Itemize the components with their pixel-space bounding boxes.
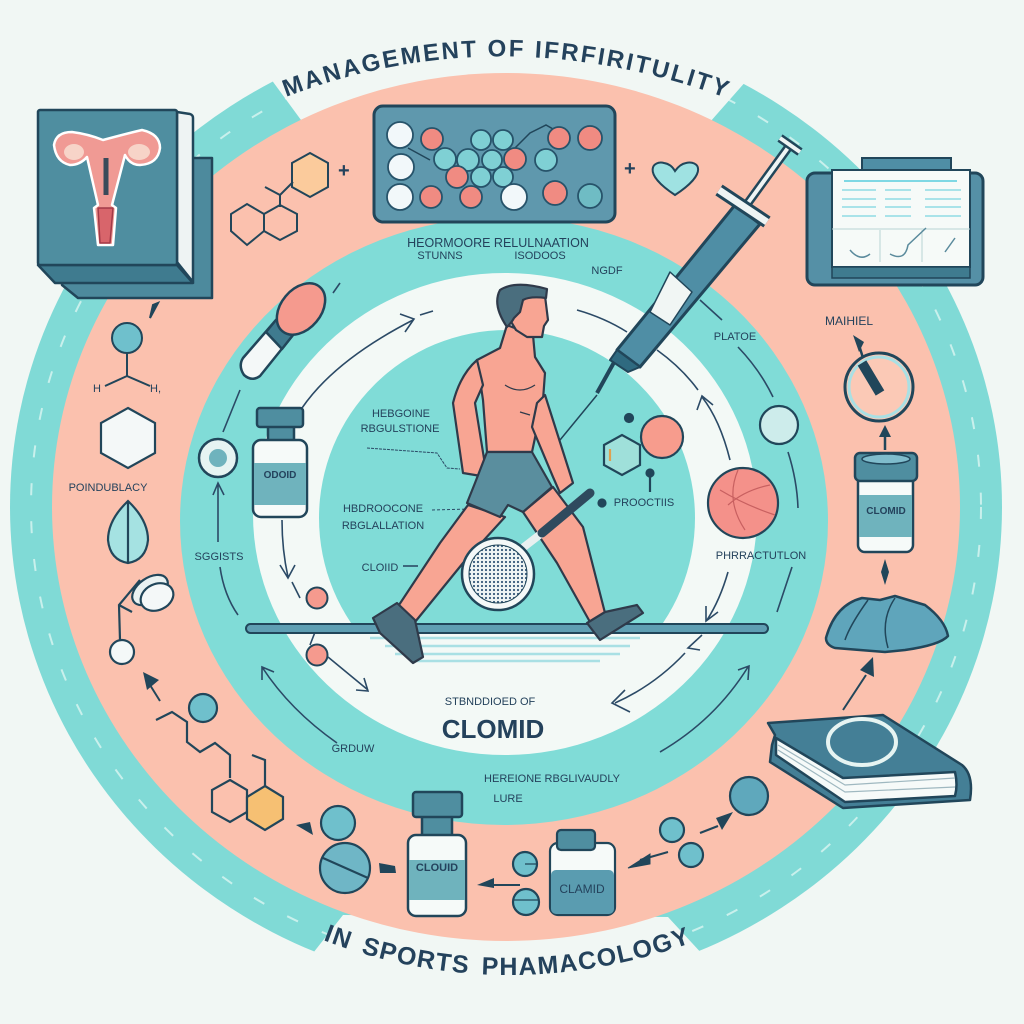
icon: small pills and bottom jar: CLAMID <box>559 882 605 896</box>
arrow to pads <box>843 657 874 710</box>
plus signs <box>338 158 636 182</box>
plus signs: + <box>338 160 350 182</box>
icon: right bottle <box>855 453 917 552</box>
plus signs: + <box>624 158 636 180</box>
text labels: HBDROOCONE <box>343 503 423 515</box>
icon: pale pill <box>760 406 798 444</box>
white ring <box>253 273 757 755</box>
text labels: HEREIONE RBGLIVAUDLY <box>484 773 621 785</box>
icon: magnifier <box>845 335 913 450</box>
icon: lower molecule <box>156 694 283 830</box>
text labels: NGDF <box>591 265 623 277</box>
central teal circle <box>319 330 695 623</box>
text labels: GRDUW <box>332 743 375 755</box>
icon: round tablet <box>199 439 237 477</box>
icon: left molecule: H <box>93 383 101 395</box>
text labels: CLOIID <box>362 562 398 574</box>
subtitle: IN SPORTS PHAMACOLOGY <box>324 924 685 975</box>
platform bar <box>246 624 768 633</box>
icon: left vial <box>253 408 307 517</box>
icon: hexagon and ball <box>598 414 683 506</box>
text labels: RBGULSTIONE <box>361 423 439 435</box>
icon: small pills and bottom jar <box>513 830 615 915</box>
icon: pair of blue pads <box>826 596 948 652</box>
text labels: MAIHIEL <box>825 314 873 328</box>
text labels: STUNNS <box>417 250 463 262</box>
icon: left molecule: H, <box>150 383 161 395</box>
icon: bottom vial <box>408 792 466 916</box>
text labels: HEBGOINE <box>372 408 430 420</box>
icon: uterus book <box>38 110 212 298</box>
arrow <box>477 878 520 888</box>
salmon ring <box>52 73 960 941</box>
icon: tablets left of vial <box>296 806 396 893</box>
icon: right bottle: CLOMID <box>866 506 906 517</box>
platform stripes <box>370 638 640 661</box>
text labels: PHRRACTUTLON <box>716 550 806 562</box>
icon: tennis racket <box>462 493 590 610</box>
text labels: HEORMOORE RELULNAATION <box>407 236 589 250</box>
icon: top molecule <box>231 153 328 245</box>
icon: capsule cluster <box>110 569 178 664</box>
icon: large salmon sphere <box>708 468 778 538</box>
icon: blister pack <box>374 106 615 222</box>
text labels: POINDUBLACY <box>69 482 148 494</box>
icon: white hexagon <box>101 408 155 468</box>
icon: bottom vial: CLOUID <box>416 862 458 874</box>
icon: central figure walking <box>373 285 643 663</box>
label: Clomid: CLOMID <box>442 714 544 744</box>
icon: double arrow <box>881 559 889 585</box>
title: MANAGEMENT OF IFRFIRITULITY <box>282 40 730 96</box>
icon: capsule <box>241 274 335 379</box>
text labels: PROOCTIIS <box>614 497 674 509</box>
text labels: LURE <box>493 793 523 805</box>
text labels: RBGLALLATION <box>342 520 424 532</box>
icon: clipboard chart <box>807 158 983 285</box>
bottom right pills <box>660 777 768 867</box>
text labels: STBNDDIOED OF <box>445 696 536 708</box>
text labels: ISODOOS <box>514 250 566 262</box>
arrow <box>143 672 160 701</box>
text labels <box>69 236 873 805</box>
text labels: PLATOE <box>714 331 756 343</box>
icon: heart <box>653 163 698 195</box>
inner teal ring <box>180 217 828 825</box>
icon: left molecule <box>93 303 161 395</box>
small red molecules <box>306 588 328 666</box>
circular arrows <box>213 283 798 752</box>
icon: book <box>768 715 971 808</box>
icon: syringe <box>560 138 800 440</box>
arrow <box>628 852 668 868</box>
icon: leaf tablet <box>108 501 148 563</box>
text labels: SGGISTS <box>195 551 243 563</box>
icon: left vial: ODOID <box>264 470 296 481</box>
